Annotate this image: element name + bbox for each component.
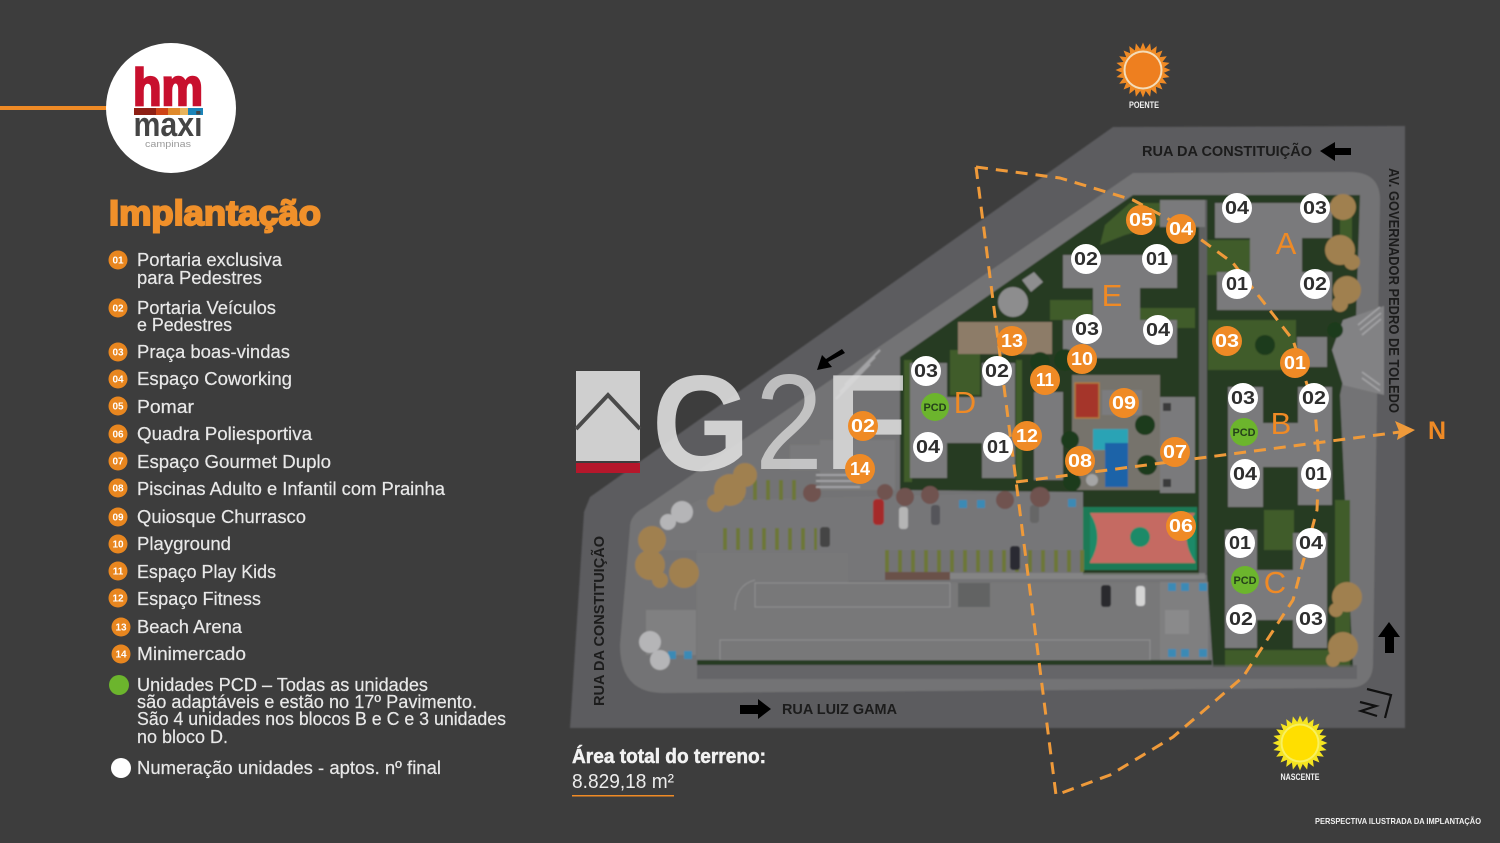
street label: Rua Luiz Gama: RUA LUIZ GAMA <box>782 702 898 718</box>
logo: hm maxi campinas: maxi <box>134 106 202 144</box>
legend item 01: para Pedestres <box>137 267 262 288</box>
label: Nascente: NASCENTE <box>1280 772 1320 783</box>
legend item 02: Portaria Veículos <box>137 297 276 318</box>
legend item 06: 06 <box>112 430 124 440</box>
legend item PCD units: no bloco D. <box>137 726 228 747</box>
block 07 skylights <box>1163 403 1171 487</box>
crosswalks <box>1358 307 1381 391</box>
logo red bar <box>576 463 640 473</box>
footnote: PERSPECTIVA ILUSTRADA DA IMPLANTAÇÃO <box>1315 816 1481 826</box>
unit number markers: 04 <box>916 437 940 457</box>
unit number markers: 02 <box>1229 609 1253 629</box>
arrow: west street direction <box>1320 142 1351 161</box>
unit number markers: 02 <box>1303 274 1327 294</box>
lawn patches <box>904 203 1352 667</box>
sports court <box>1083 507 1197 570</box>
street label: Rua da Constituição left: RUA DA CONSTITUIÇÃO <box>590 536 608 706</box>
pool deck parasol <box>1086 474 1098 486</box>
unit number markers: 01 <box>987 437 1009 457</box>
white trees <box>639 501 693 670</box>
garage hedge <box>697 660 1212 665</box>
legend item unit numbering: Numeração unidades - aptos. nº final <box>137 757 441 778</box>
G2F watermark logo <box>576 346 908 499</box>
playground <box>1075 383 1099 418</box>
amenity number markers: 07 <box>1163 442 1187 462</box>
label: Poente: POENTE <box>1129 100 1159 111</box>
building C <box>1225 530 1327 648</box>
north axis arrow <box>1016 421 1415 482</box>
legend item 10: 10 <box>112 540 124 550</box>
legend item 13: Beach Arena <box>137 616 243 637</box>
legend item 08: 08 <box>112 484 124 494</box>
unit number markers: 03 <box>1075 319 1099 339</box>
arrow: entrance <box>817 349 845 370</box>
legend item 02: 02 <box>112 304 124 314</box>
unit number markers: 04 <box>1299 533 1323 553</box>
legend item 04: 04 <box>112 374 124 386</box>
legend item 01 <box>108 249 283 288</box>
icon: setting sun <box>1116 42 1170 98</box>
amenity number markers: 08 <box>1068 451 1092 471</box>
amenity number markers <box>845 205 1310 541</box>
planting and fence <box>885 572 1205 580</box>
building E <box>1063 255 1177 358</box>
legend item 02 <box>108 297 276 335</box>
amenity number markers: 14 <box>850 459 870 479</box>
parking trees <box>803 484 1050 509</box>
legend item PCD units: São 4 unidades nos blocos B e C e 3 unidades <box>137 708 506 729</box>
amenity number markers: 03 <box>1215 331 1239 351</box>
north symbol <box>1360 689 1391 718</box>
pools <box>1093 429 1128 487</box>
garage shadow on sidewalk <box>697 665 1357 679</box>
kiosk 09 <box>1102 390 1142 415</box>
small kiosk <box>1022 272 1043 292</box>
entrance plaza <box>1332 306 1384 395</box>
unit number markers: 02 <box>985 361 1009 381</box>
amenity number markers: 13 <box>1001 331 1023 351</box>
amenity number markers: 09 <box>1112 393 1136 413</box>
north label: N <box>1428 417 1446 445</box>
site plan <box>570 126 1405 728</box>
legend item 01: Portaria exclusiva <box>137 249 283 270</box>
logo chevron <box>576 395 640 429</box>
legend item 09: Quiosque Churrasco <box>137 506 306 527</box>
unit number markers: 04 <box>1225 198 1249 218</box>
legend item 02: e Pedestres <box>137 314 232 335</box>
legend item 14: Minimercado <box>137 643 246 664</box>
legend item 06: Quadra Poliesportiva <box>137 423 313 444</box>
legend item 04: Espaço Coworking <box>137 368 292 389</box>
legend item PCD units: Unidades PCD – Todas as unidades <box>137 674 428 695</box>
accessible stalls <box>668 499 1207 659</box>
amenity number markers: 10 <box>1071 349 1093 369</box>
parking strips <box>660 490 1085 628</box>
unit number markers: 02 <box>1302 388 1326 408</box>
legend item 08: Piscinas Adulto e Infantil com Prainha <box>137 478 446 499</box>
legend item 05: Pomar <box>137 396 194 417</box>
legend item 12: 12 <box>112 594 124 604</box>
legend item 11: 11 <box>113 566 124 578</box>
covered garage <box>697 553 1160 660</box>
unit number markers: 03 <box>1299 609 1323 629</box>
entrance crosswalk <box>816 350 880 487</box>
stall zone <box>1160 582 1208 660</box>
logo: hm maxi campinas: hm <box>133 59 203 117</box>
legend item 07: Espaço Gourmet Duplo <box>137 451 331 472</box>
legend item 10: Playground <box>137 533 231 554</box>
block letters: E <box>1102 278 1122 313</box>
street label: Av. Governador Pedro de Toledo: AV. GOVERNADOR PEDRO DE TOLEDO <box>1385 168 1401 413</box>
garage box <box>958 583 990 607</box>
title: Implantação: Implantação <box>109 194 321 233</box>
legend item 03: Praça boas-vindas <box>137 341 290 362</box>
central walkway <box>1199 200 1207 575</box>
logo square <box>576 371 640 461</box>
unit number markers: 02 <box>1074 249 1098 269</box>
PCD markers: PCD <box>1234 575 1257 587</box>
legend item 12: Espaço Fitness <box>137 588 261 609</box>
sidewalk and paving <box>620 172 1380 693</box>
left corner stalls <box>646 610 696 655</box>
legend item PCD units <box>109 674 506 747</box>
icon: rising sun <box>1272 716 1328 770</box>
block letters <box>954 226 1297 600</box>
amenity number markers: 04 <box>1169 219 1193 239</box>
unit number markers: 04 <box>1146 320 1170 340</box>
total area label: Área total do terreno: <box>572 745 766 768</box>
pool deck <box>1072 375 1160 490</box>
area underline <box>572 795 674 796</box>
palms <box>1030 322 1343 491</box>
PCD markers: PCD <box>924 402 947 414</box>
unit number markers: 01 <box>1146 249 1168 269</box>
amenity number markers: 11 <box>1036 370 1054 390</box>
legend item PCD units: são adaptáveis e estão no 17º Pavimento. <box>137 691 477 712</box>
logo: hm maxi campinas: campinas <box>145 139 191 150</box>
unit number markers: 03 <box>1303 198 1327 218</box>
parking lot paving <box>655 492 1083 580</box>
amenity buildings <box>790 200 1327 493</box>
round plaza <box>998 287 1028 317</box>
legend item 14: 14 <box>115 650 127 660</box>
beach arena <box>958 322 1052 354</box>
solar path dashed sector <box>976 167 1319 795</box>
legend item 11: Espaço Play Kids <box>137 561 276 582</box>
building B <box>1228 387 1332 507</box>
unit number markers: 01 <box>1226 274 1248 294</box>
PCD markers: PCD <box>1232 427 1256 439</box>
logo: hm maxi campinas <box>106 43 236 173</box>
legend item 05: 05 <box>112 402 124 412</box>
logo letter F: F <box>824 346 908 498</box>
legend item 09: 09 <box>112 512 124 524</box>
amenity number markers: 02 <box>851 416 875 436</box>
legend item 01: 01 <box>112 256 124 266</box>
arrow: upward direction <box>1378 622 1400 653</box>
logo letter G: G <box>652 347 750 499</box>
legend item 13: 13 <box>115 622 127 634</box>
orange header line <box>0 106 108 110</box>
PCD markers <box>921 393 1259 594</box>
block letters: D <box>954 385 976 420</box>
unit number markers: 03 <box>914 361 938 381</box>
gardens <box>900 195 1360 667</box>
legend item 03: 03 <box>112 348 124 358</box>
legend item 07: 07 <box>112 456 124 468</box>
amenity number markers: 05 <box>1129 210 1153 230</box>
legend item 05 <box>108 396 194 417</box>
amenity number markers: 06 <box>1169 516 1193 536</box>
block letters: A <box>1276 226 1297 261</box>
arrow: Luiz Gama direction <box>740 699 771 719</box>
total area value: 8.829,18 m² <box>572 771 674 793</box>
block letters: C <box>1264 565 1286 600</box>
unit number markers: 03 <box>1231 388 1255 408</box>
building D <box>910 363 1015 478</box>
amenity number markers: 01 <box>1284 353 1306 373</box>
block letters: B <box>1271 406 1291 441</box>
garage markings <box>720 580 1150 660</box>
unit number markers: 04 <box>1233 464 1257 484</box>
street label: Rua da Constituição top: RUA DA CONSTITUIÇÃO <box>1142 142 1312 160</box>
unit number markers: 01 <box>1229 533 1251 553</box>
road <box>570 126 1405 728</box>
tan trees <box>635 194 1362 667</box>
parked cars <box>820 499 1145 607</box>
logo numeral 2: 2 <box>755 346 823 498</box>
legend <box>108 249 506 778</box>
unit number markers <box>911 193 1331 634</box>
amenity number markers: 12 <box>1016 426 1038 446</box>
unit number markers: 01 <box>1305 464 1327 484</box>
building A <box>1215 203 1332 310</box>
